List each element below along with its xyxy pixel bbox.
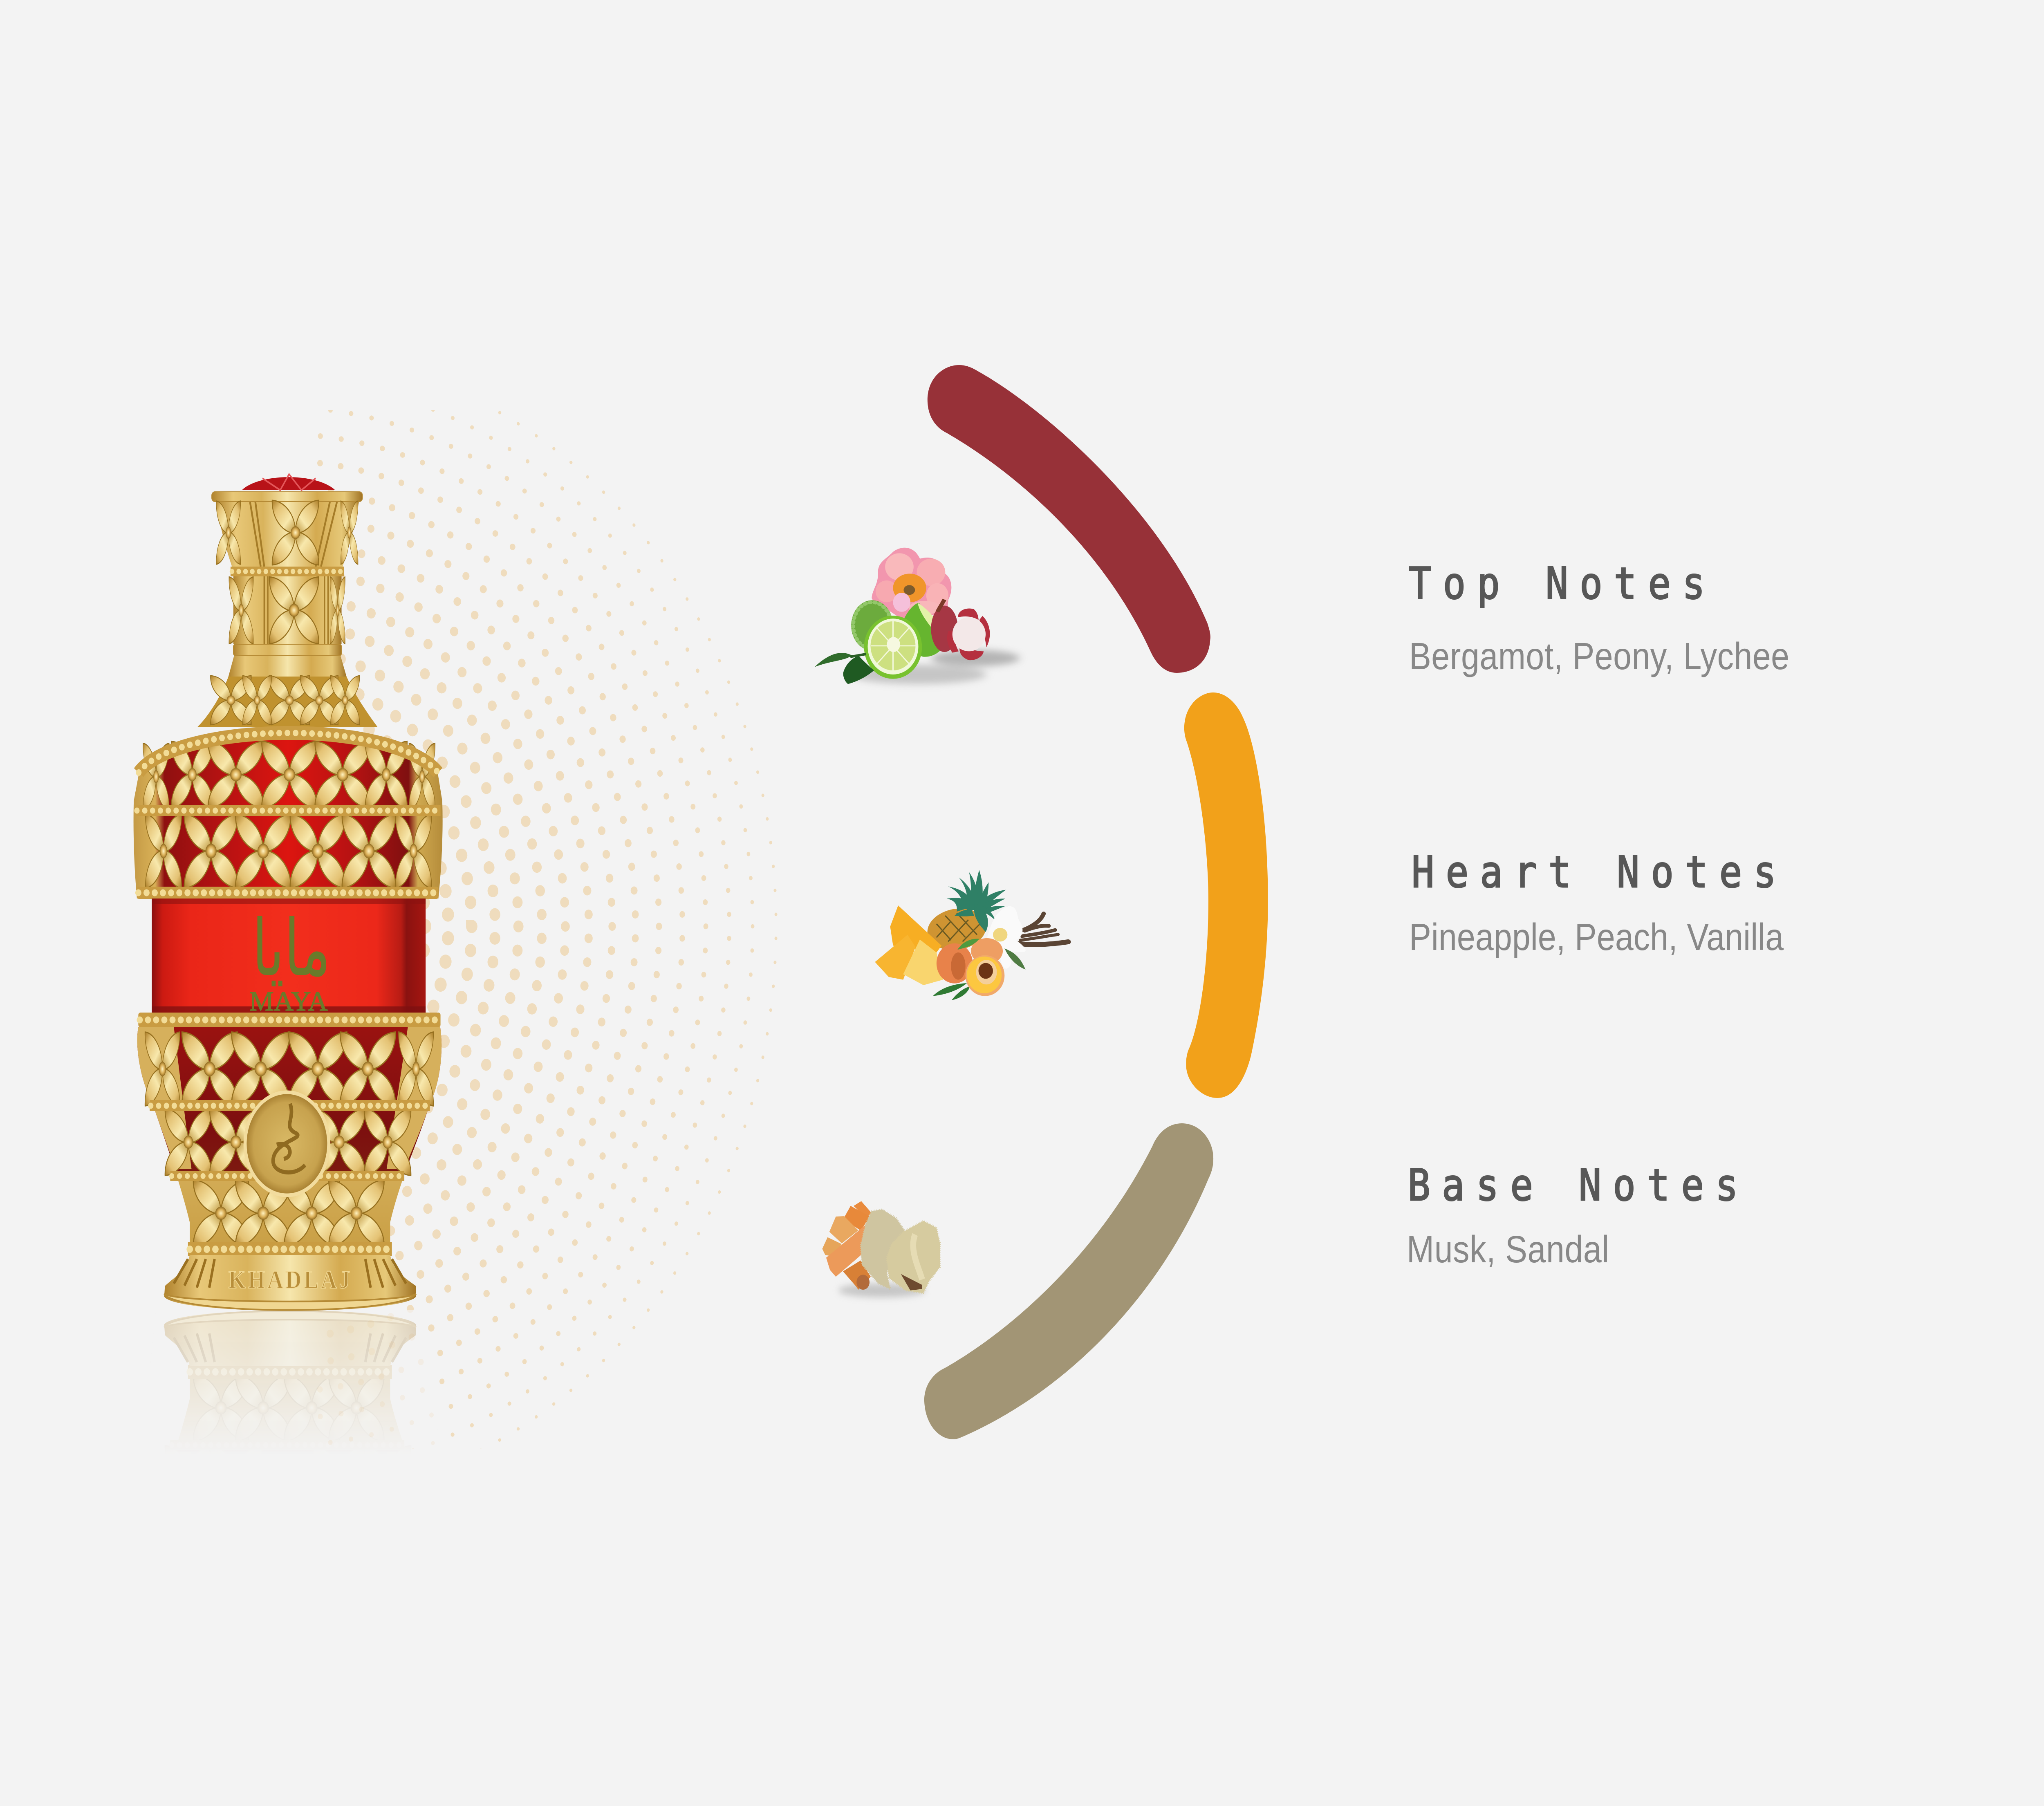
jasmine flower <box>987 906 1026 970</box>
musk pods <box>861 1209 940 1293</box>
ingredients: Musk, Sandal <box>1407 1228 1609 1270</box>
pineapple crown <box>947 870 1006 932</box>
bottle reflection <box>164 1310 435 1449</box>
leaves <box>815 653 874 684</box>
lychee closed <box>931 600 958 652</box>
vanilla pods <box>1018 914 1068 945</box>
upper cage <box>134 727 443 899</box>
halved bergamot <box>904 603 947 657</box>
ingredients: Pineapple, Peach, Vanilla <box>1409 916 1784 958</box>
peaches <box>933 938 1004 1000</box>
cap <box>212 492 363 656</box>
text block: heart notes <box>1409 847 1788 958</box>
MAYA label: MAYA <box>249 986 328 1017</box>
text block: base notes <box>1407 1161 1750 1270</box>
perfume bottle <box>134 474 443 1311</box>
medallion <box>245 1092 329 1195</box>
peony <box>872 548 951 618</box>
bergamot slice <box>864 616 922 679</box>
icon: top notes ingredients (bergamot, peony, lychee) <box>815 548 1020 684</box>
red glass band with label <box>152 899 426 1020</box>
neck and shoulder <box>197 656 378 727</box>
arc: base notes <box>924 1123 1213 1439</box>
sandalwood sticks <box>822 1201 871 1290</box>
heading: Base Notes <box>1408 1161 1750 1211</box>
lychee open <box>947 609 990 660</box>
cap gem <box>242 474 335 490</box>
heading: Top Notes <box>1409 559 1717 609</box>
icon: heart notes ingredients (pineapple, peach, vanilla) <box>875 870 1068 1000</box>
halftone dot pattern behind the bottle <box>317 410 778 1449</box>
arc: top notes <box>928 365 1210 673</box>
arc: heart notes <box>1184 692 1268 1098</box>
pineapple wedges <box>875 905 943 985</box>
ingredients: Bergamot, Peony, Lychee <box>1409 635 1789 677</box>
KHADLAJ lettering: KHADLAJ <box>229 1265 350 1294</box>
arabic label: مايا <box>252 903 331 993</box>
heading: Heart Notes <box>1412 847 1788 898</box>
infographic canvas <box>133 365 1788 1449</box>
whole bergamot <box>851 600 893 651</box>
icon: base notes ingredients (musk, sandal) <box>822 1201 940 1297</box>
lower bowl and foot <box>137 1013 442 1311</box>
pineapple body <box>923 903 990 955</box>
text block: top notes <box>1409 559 1789 677</box>
